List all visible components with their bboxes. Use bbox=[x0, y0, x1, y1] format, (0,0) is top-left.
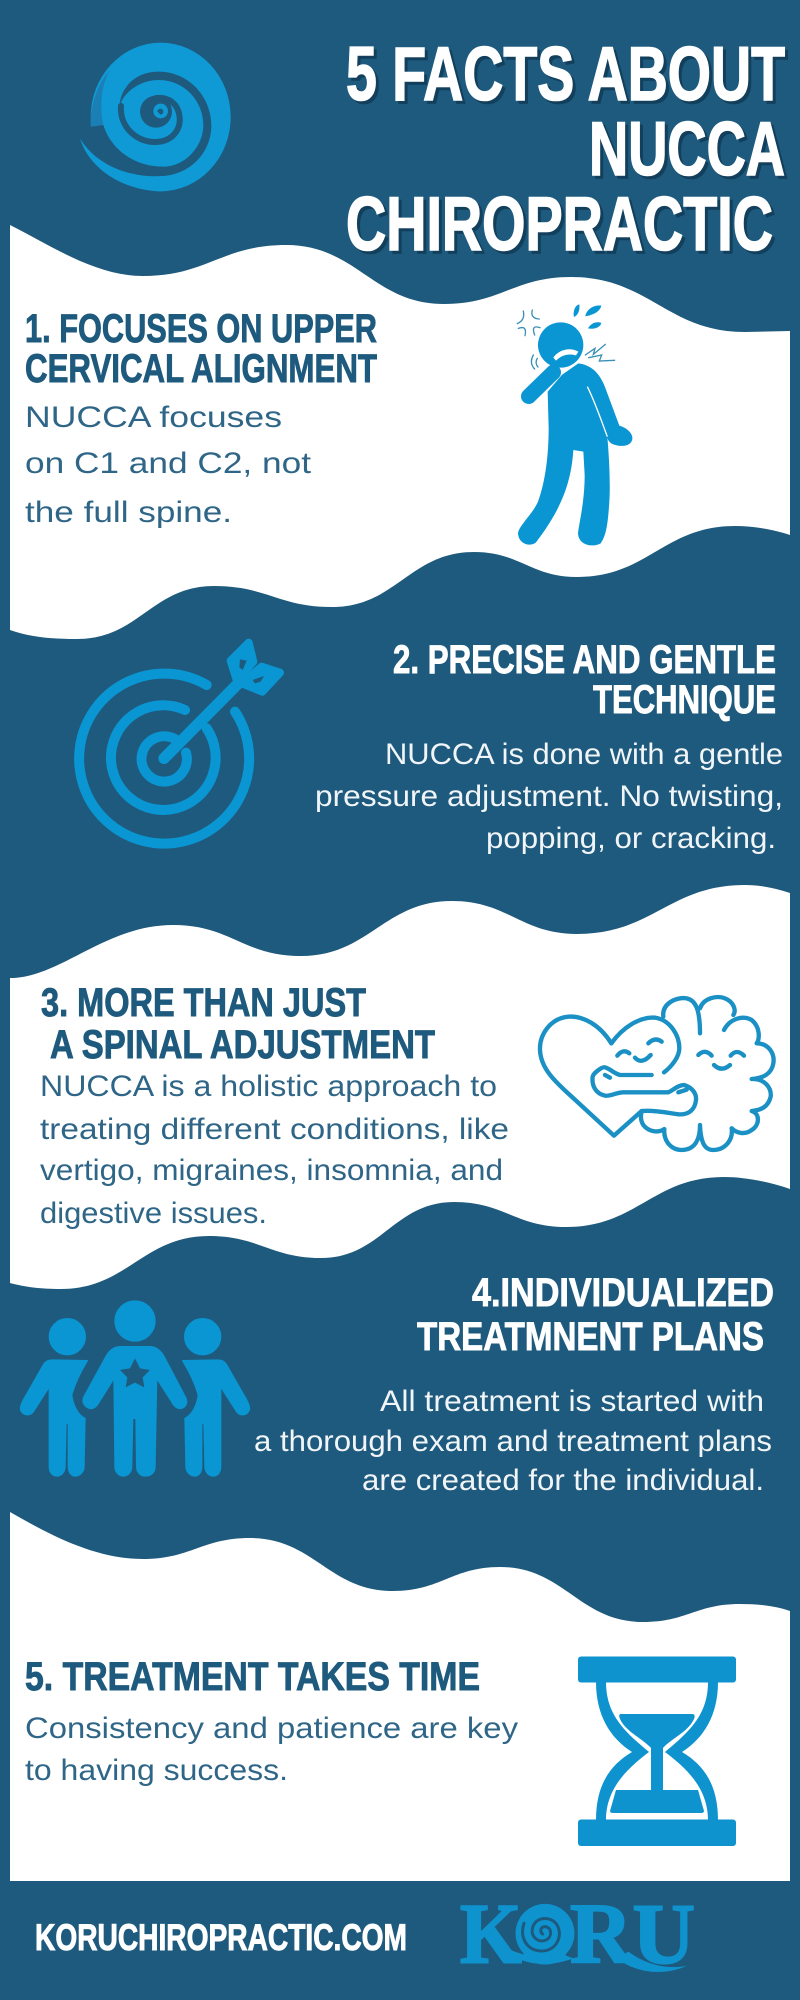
heading: fact 3 bbox=[41, 981, 435, 1067]
body: fact 5 bbox=[25, 1712, 518, 1787]
icon: koru spiral bbox=[80, 43, 231, 191]
title bbox=[346, 32, 785, 267]
body: fact 4: All treatment is started with bbox=[380, 1385, 764, 1418]
panel: fact 5 white wave bbox=[10, 1512, 790, 1881]
body: fact 1: the full spine. bbox=[25, 496, 232, 529]
panel: fact 1 white wave bbox=[10, 225, 790, 639]
logo: KORU bbox=[460, 1885, 695, 1981]
body: fact 4: a thorough exam and treatment plans bbox=[254, 1425, 772, 1458]
body: fact 2: popping, or cracking. bbox=[486, 822, 776, 855]
heading: fact 3: 3. MORE THAN JUST bbox=[41, 981, 366, 1025]
body: fact 4 bbox=[254, 1385, 772, 1497]
body: fact 5: to having success. bbox=[25, 1754, 288, 1787]
body: fact 2: pressure adjustment. No twisting, bbox=[315, 780, 783, 813]
heading: fact 4 bbox=[417, 1271, 774, 1359]
body: fact 3: vertigo, migraines, insomnia, and bbox=[40, 1154, 503, 1187]
icon: person with neck pain bbox=[517, 304, 632, 545]
logo: KORU: O bbox=[517, 1885, 573, 1981]
body: fact 1: on C1 and C2, not bbox=[25, 447, 312, 480]
body: fact 3: digestive issues. bbox=[40, 1197, 267, 1230]
body: fact 4: are created for the individual. bbox=[362, 1464, 764, 1497]
icon: heart hugging brain bbox=[540, 997, 774, 1150]
icon: target with arrow bbox=[79, 643, 280, 844]
logo: KORU: K bbox=[460, 1885, 522, 1981]
body: fact 2 bbox=[315, 738, 783, 855]
heading: fact 2 bbox=[393, 638, 776, 722]
body: fact 3 bbox=[40, 1070, 509, 1230]
body: fact 3: treating different conditions, like bbox=[40, 1113, 509, 1146]
logo: KORU: RU bbox=[570, 1885, 695, 1981]
footer url: KORUCHIROPRACTIC.COM bbox=[35, 1917, 407, 1958]
body: fact 1: NUCCA focuses bbox=[25, 401, 282, 434]
heading: fact 3: A SPINAL ADJUSTMENT bbox=[50, 1023, 435, 1067]
icon: three people with star bbox=[21, 1301, 249, 1476]
heading: fact 5: 5. TREATMENT TAKES TIME bbox=[25, 1655, 480, 1699]
body: fact 1 bbox=[25, 401, 312, 529]
heading: fact 1: CERVICAL ALIGNMENT bbox=[25, 347, 377, 391]
panel: fact 3 white wave bbox=[10, 885, 790, 1289]
heading: fact 1: 1. FOCUSES ON UPPER bbox=[25, 307, 377, 351]
body: fact 3: NUCCA is a holistic approach to bbox=[40, 1070, 497, 1103]
body: fact 2: NUCCA is done with a gentle bbox=[385, 738, 783, 771]
body: fact 5: Consistency and patience are key bbox=[25, 1712, 518, 1745]
icon: hourglass bbox=[578, 1656, 736, 1846]
heading: fact 1 bbox=[25, 307, 377, 391]
